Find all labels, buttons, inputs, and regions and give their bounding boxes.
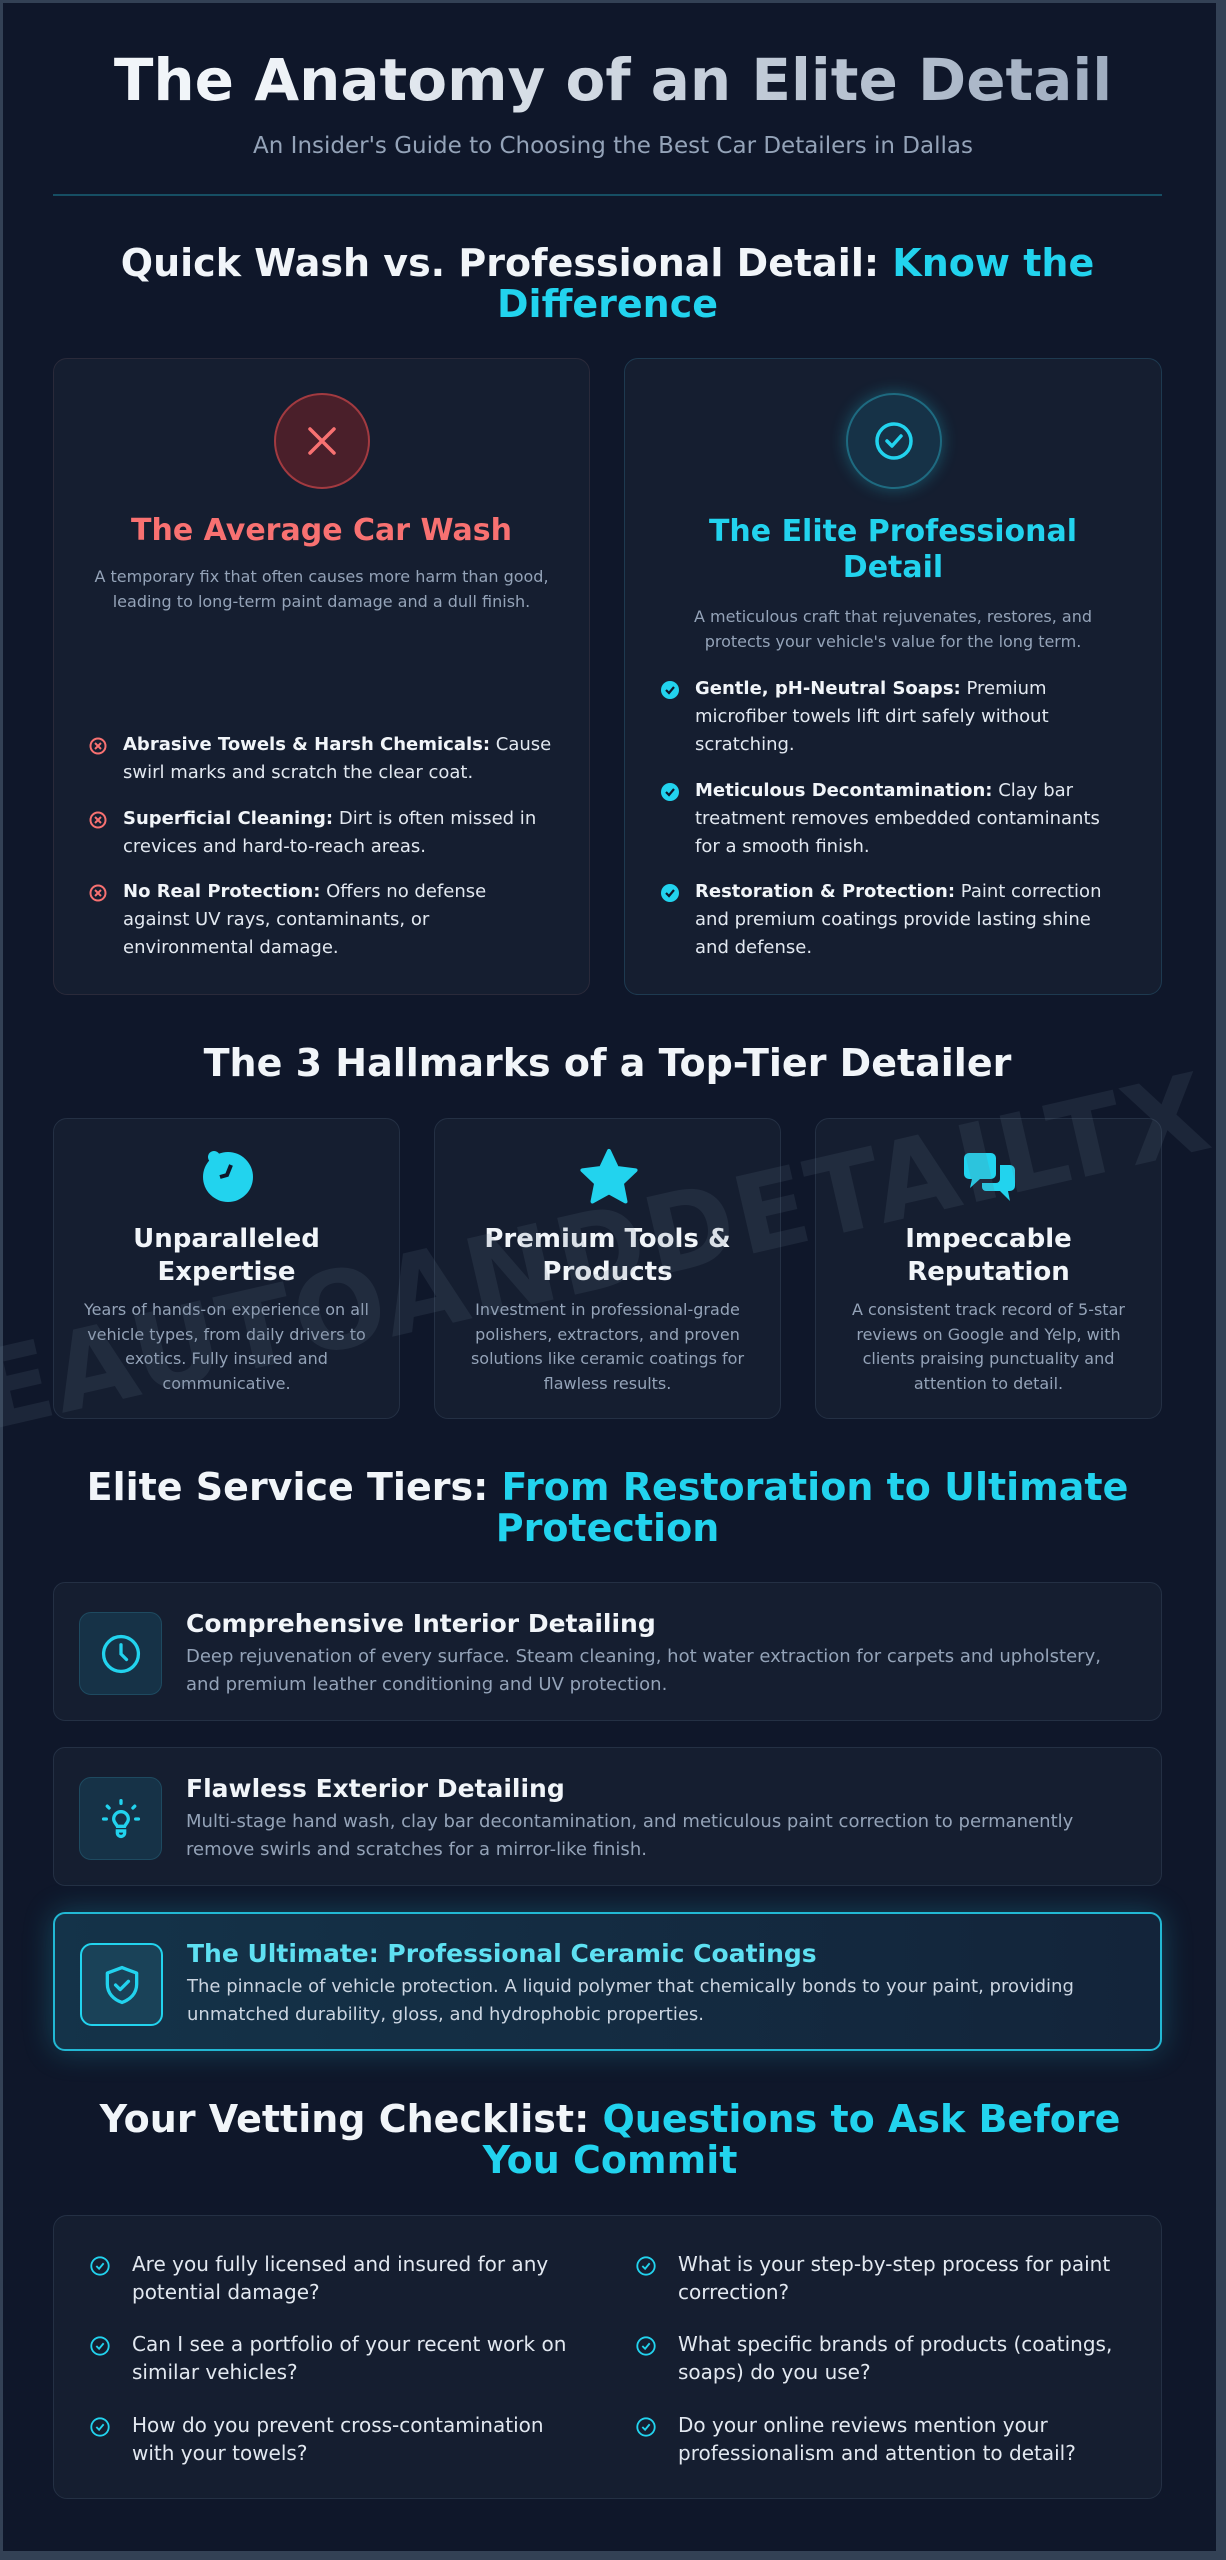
description: Deep rejuvenation of every surface. Steam cleaning, hot water extraction for carpets and upholstery, and premium leather conditioning and UV protection. <box>186 1646 1101 1695</box>
panel: checklist: Can I see a portfolio of your recent work on similar vehicles? <box>132 2332 566 2384</box>
watermark: EAUTOANDDETAILTX <box>0 1050 1222 1455</box>
panel: expertise <box>53 1118 400 1419</box>
description: Multi-stage hand wash, clay bar decontamination, and meticulous paint correction to permanently remove swirls and scratches for a mirror-like finish. <box>186 1811 1073 1860</box>
title <box>905 1224 1072 1287</box>
panel: elite professional detail <box>624 358 1162 995</box>
description: A temporary fix that often causes more harm than good, leading to long-term paint damage and a dull finish. <box>94 567 549 611</box>
card title: The Average Car Wash <box>131 513 512 548</box>
tier: ceramic coatings (highlight) <box>53 1912 1162 2051</box>
panel: checklist: Are you fully licensed and insured for any potential damage? <box>132 2252 548 2304</box>
icon: shield <box>80 1943 163 2026</box>
description: A consistent track record of 5-star reviews on Google and Yelp, with clients praising punctuality and attention to detail. <box>852 1300 1125 1392</box>
subtitle: An Insider's Guide to Choosing the Best Car Detailers in Dallas <box>253 133 973 159</box>
panel: checklist: Do your online reviews mention your professionalism and attention to detail? <box>678 2413 1076 2465</box>
bullet list <box>661 678 1101 958</box>
title: Impeccable <box>905 1224 1072 1254</box>
title: Products <box>542 1257 673 1287</box>
heading: quick wash vs professional: Quick Wash vs. Professional Detail: Know the Difference <box>121 241 1094 326</box>
icon: clock <box>79 1612 162 1695</box>
description: Investment in professional-grade polishers, extractors, and proven solutions like ceramic coatings for flawless results. <box>471 1300 744 1392</box>
icon: clock badge <box>203 1151 253 1202</box>
heading: service tiers: Elite Service Tiers: From Restoration to Ultimate Protection <box>87 1465 1128 1550</box>
description: Years of hands-on experience on all vehicle types, from daily drivers to exotics. Fully insured and communicative. <box>84 1300 369 1392</box>
tier: interior <box>53 1582 1162 1721</box>
title: The Ultimate: Professional Ceramic Coatings <box>187 1939 817 1968</box>
icon: chat bubbles <box>964 1153 1015 1201</box>
title: Reputation <box>907 1257 1070 1287</box>
panel: checklist <box>53 2215 1162 2499</box>
panel: checklist: What is your step-by-step process for paint correction? <box>678 2252 1110 2304</box>
description: The pinnacle of vehicle protection. A liquid polymer that chemically bonds to your paint, providing unmatched durability, gloss, and hydrophobic properties. <box>187 1976 1074 2025</box>
bullet list: No Real Protection: Offers no defense against UV rays, contaminants, or environmental damage. <box>123 881 486 958</box>
title: Comprehensive Interior Detailing <box>186 1609 656 1638</box>
icon: check circle <box>846 393 942 489</box>
card title: The Elite Professional Detail <box>709 514 1077 585</box>
title: The Anatomy of an Elite Detail <box>114 46 1112 114</box>
title <box>484 1224 731 1287</box>
tier: exterior <box>53 1747 1162 1886</box>
title: Premium Tools & <box>484 1224 731 1254</box>
bullet list: Restoration & Protection: Paint correction and premium coatings provide lasting shine and defense. <box>695 881 1101 958</box>
icon: lightbulb <box>79 1777 162 1860</box>
title <box>133 1224 320 1287</box>
icon: x circle <box>274 393 370 489</box>
panel: reputation <box>815 1118 1162 1419</box>
panel: checklist: What specific brands of products (coatings, soaps) do you use? <box>678 2332 1112 2384</box>
bullet list: Superficial Cleaning: Dirt is often missed in crevices and hard-to-reach areas. <box>123 808 536 857</box>
bullet list: Gentle, pH-Neutral Soaps: Premium microfiber towels lift dirt safely without scratching. <box>695 678 1049 755</box>
heading: 3 hallmarks: The 3 Hallmarks of a Top-Tier Detailer <box>204 1041 1011 1085</box>
bullet list: Meticulous Decontamination: Clay bar treatment removes embedded contaminants for a smooth finish. <box>695 780 1100 857</box>
description: A meticulous craft that rejuvenates, restores, and protects your vehicle's value for the long term. <box>694 607 1092 651</box>
panel: checklist: How do you prevent cross-contamination with your towels? <box>132 2413 544 2465</box>
bullet list <box>90 734 551 958</box>
title: Flawless Exterior Detailing <box>186 1774 565 1803</box>
title: Expertise <box>157 1257 296 1287</box>
panel: premium tools <box>434 1118 781 1419</box>
panel: average car wash <box>53 358 590 995</box>
icon: star <box>580 1148 638 1204</box>
title: Unparalleled <box>133 1224 320 1254</box>
bullet list: Abrasive Towels & Harsh Chemicals: Cause swirl marks and scratch the clear coat. <box>123 734 551 783</box>
heading: vetting checklist: Your Vetting Checklist: Questions to Ask Before You Commit <box>100 2097 1120 2182</box>
